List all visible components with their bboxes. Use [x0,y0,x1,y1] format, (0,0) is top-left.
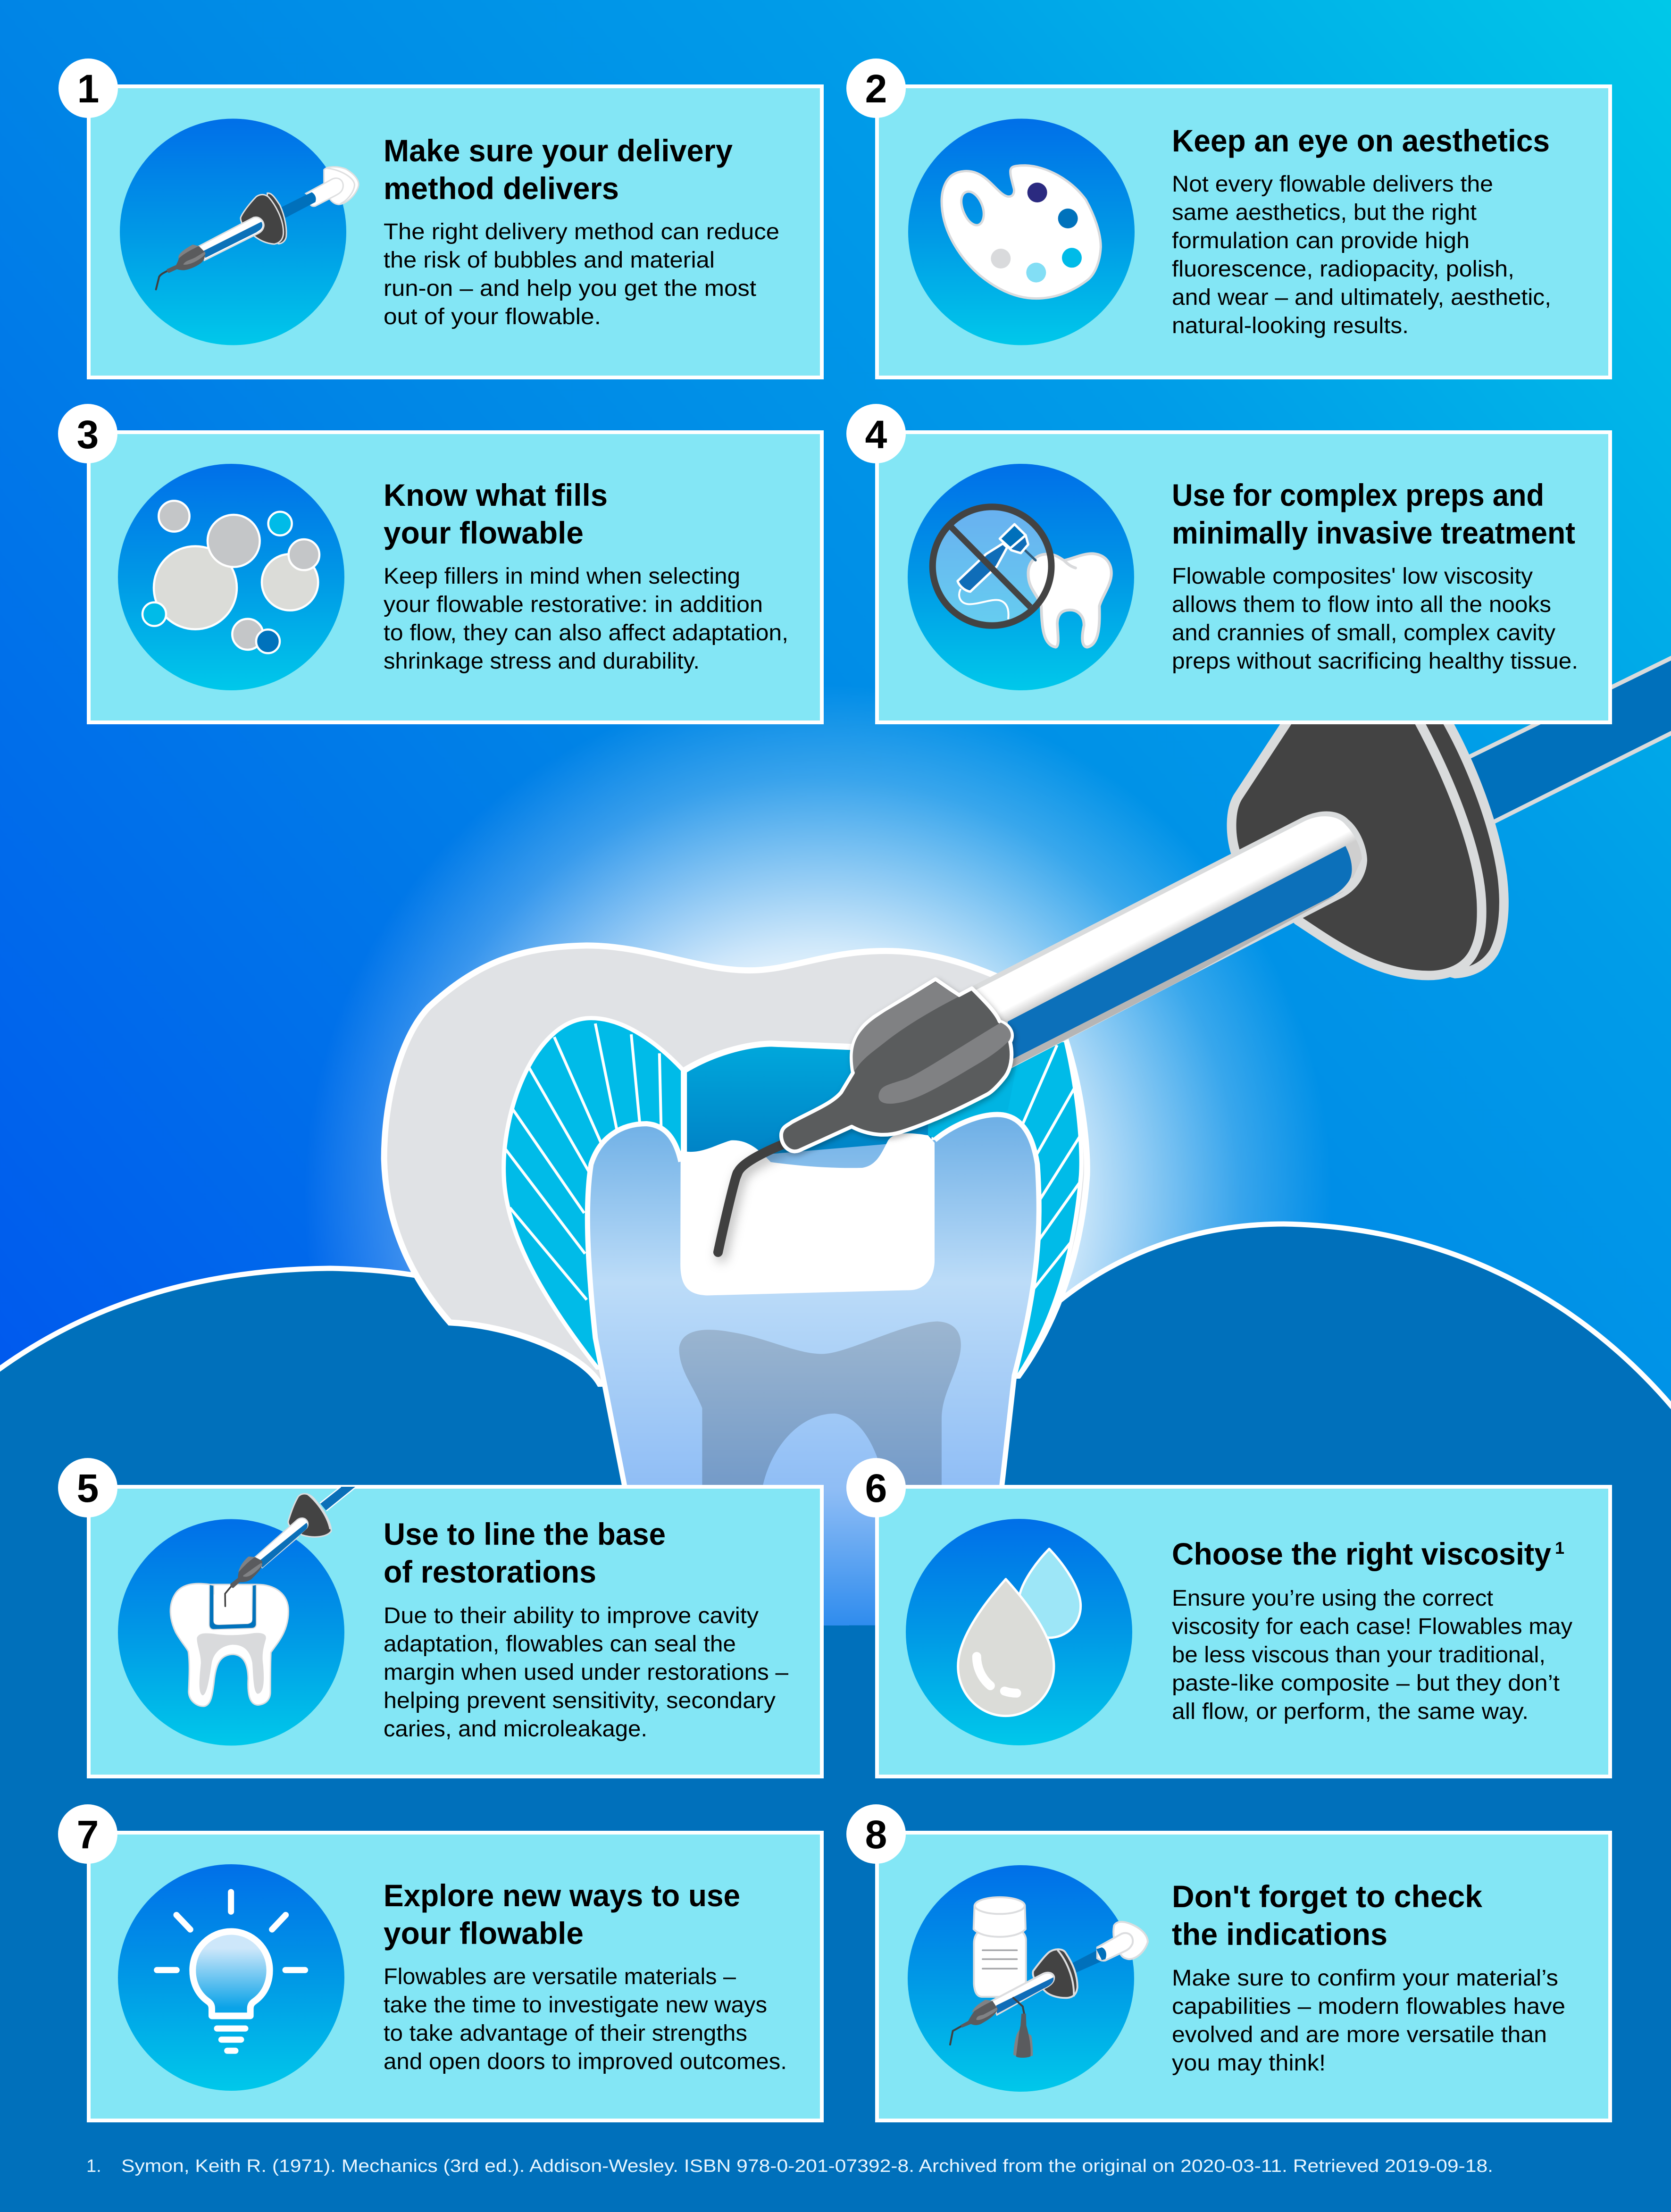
body text: Ensure you’re using the correct [1172,1586,1493,1611]
dentine segments right of cavity [928,1063,1017,1138]
body text: be less viscous than your traditional, [1172,1642,1546,1667]
pulp chamber [679,1322,961,1489]
heading: Make sure your delivery [384,133,733,168]
body text [1172,564,1578,674]
barrel [972,812,1367,1070]
heading: Use to line the base [384,1517,666,1551]
panel background [89,1833,822,2120]
heading [384,1878,740,1951]
body text: and open doors to improved outcomes. [384,2049,787,2074]
body text: Flowable composites' low viscosity [1172,564,1533,589]
body text [384,564,788,674]
badge 1 [58,59,118,118]
badge 1: 1 [77,67,99,111]
body text: Flowables are versatile materials – [384,1964,736,1989]
panel 8: indications [877,1833,1610,2120]
heading: Know what fills [384,478,608,512]
badge 5 [58,1458,117,1517]
central tooth cross-section [384,946,1087,1384]
panel background [877,1833,1610,2120]
dentine with stripes [504,1018,1081,1375]
body text: to take advantage of their strengths [384,2021,747,2046]
body text: run-on – and help you get the most [384,276,756,301]
heading [1172,478,1575,550]
icon: filler particles [118,464,344,690]
body text: caries, and microleakage. [384,1717,647,1742]
body text [1172,1586,1572,1724]
panel background [877,1487,1610,1776]
panel 6: viscosity [877,1487,1610,1776]
icon: droplets [906,1519,1132,1745]
heading with reference marker: Choose the right viscosity [1172,1536,1551,1571]
icon: bottle and syringe [908,1865,1148,2092]
body text: natural-looking results. [1172,313,1409,338]
badge 2 [846,59,906,118]
icon: palette [908,119,1135,345]
body text: Keep fillers in mind when selecting [384,564,740,589]
body text: the risk of bubbles and material [384,248,715,273]
body text: all flow, or perform, the same way. [1172,1699,1529,1724]
body text: same aesthetics, but the right [1172,200,1477,225]
heading: Use for complex preps and [1172,478,1544,512]
badge 3 [58,404,117,463]
body text: formulation can provide high [1172,228,1470,253]
panel background [89,432,822,722]
number badges [58,59,906,1864]
root outline [587,1114,1039,1625]
badge 7 [58,1804,117,1864]
icon: lined tooth with syringe [118,1487,356,1746]
body text: margin when used under restorations – [384,1660,788,1685]
panel background [89,1487,822,1776]
dark blue gum hills [0,1224,1671,2212]
badge 4: 4 [865,412,887,457]
root and pulp [587,1114,1039,1625]
heading [1172,1879,1482,1952]
body text: paste-like composite – but they don’t [1172,1671,1560,1696]
body text: out of your flowable. [384,304,601,329]
body text: Not every flowable delivers the [1172,172,1493,197]
heading: the indications [1172,1917,1387,1952]
body text: take the time to investigate new ways [384,1993,767,2018]
badge 6 [846,1458,906,1517]
body text: The right delivery method can reduce [384,219,779,244]
white filling [680,1133,935,1295]
panel 1: delivery method [89,86,822,377]
badge 4 [846,404,906,463]
body text: and crannies of small, complex cavity [1172,620,1555,645]
badge 7: 7 [77,1812,99,1857]
badge 8 [846,1804,906,1864]
panel 4: complex preps [877,432,1610,722]
body text: you may think! [1172,2051,1326,2076]
footnote: Symon, Keith R. (1971). Mechanics (3rd ed.). Addison-Wesley. ISBN 978-0-201-07392-8. Archived from the original on 2020-03-11. Retrieved 2019-09-18. [121,2156,1493,2176]
large syringe [718,654,1671,1252]
body text: adaptation, flowables can seal the [384,1632,736,1657]
body text [1172,172,1551,338]
body text: fluorescence, radiopacity, polish, [1172,257,1514,282]
body text: viscosity for each case! Flowables may [1172,1614,1572,1639]
panel 5: base lining [89,1487,822,1776]
body text: Make sure to confirm your material’s [1172,1966,1558,1991]
body text [384,219,779,329]
enamel [384,946,1087,1384]
heading: method delivers [384,171,619,206]
body text: and wear – and ultimately, aesthetic, [1172,285,1551,310]
body text: Due to their ability to improve cavity [384,1603,759,1628]
panel 7: new uses [89,1833,822,2120]
panel background [877,432,1610,722]
body text: allows them to flow into all the nooks [1172,592,1551,617]
icon: no drill and tooth [908,464,1134,690]
heading [384,1517,666,1589]
body text: capabilities – modern flowables have [1172,1994,1565,2019]
nozzle [781,979,1012,1151]
body text [384,1603,788,1742]
panel background [877,86,1610,377]
heading with reference marker: 1 [1555,1538,1564,1558]
heading: of restorations [384,1554,596,1589]
heading [384,478,608,550]
plunger rod [1415,654,1671,849]
badge 8: 8 [865,1812,887,1857]
heading: Don't forget to check [1172,1879,1482,1914]
heading: your flowable [384,1916,584,1951]
badge 6: 6 [865,1466,887,1510]
footnote: 1. [86,2156,101,2176]
heading: Keep an eye on aesthetics [1172,123,1550,158]
needle [718,1144,783,1252]
heading: minimally invasive treatment [1172,515,1575,550]
body text: helping prevent sensitivity, secondary [384,1688,776,1713]
cavity [684,1044,956,1184]
body text: preps without sacrificing healthy tissue. [1172,649,1578,674]
heading [384,133,733,206]
panel 2: aesthetics [877,86,1610,377]
badge 2: 2 [865,67,887,111]
flange [1232,715,1504,975]
panel 3: fillers [89,432,822,722]
body text: to flow, they can also affect adaptation, [384,620,788,645]
panel background [89,86,822,377]
icon: light bulb [118,1864,344,2091]
heading: your flowable [384,515,584,550]
heading: Explore new ways to use [384,1878,740,1913]
icon: syringe [120,119,359,345]
body text: your flowable restorative: in addition [384,592,763,617]
body text [384,1964,787,2074]
root body [587,1114,1039,1625]
radial glow behind tooth [283,661,1368,1746]
body text [1172,1966,1565,2076]
badge 5: 5 [77,1466,99,1510]
body text: evolved and are more versatile than [1172,2022,1547,2047]
body text: shrinkage stress and durability. [384,649,700,674]
badge 3: 3 [77,412,99,457]
